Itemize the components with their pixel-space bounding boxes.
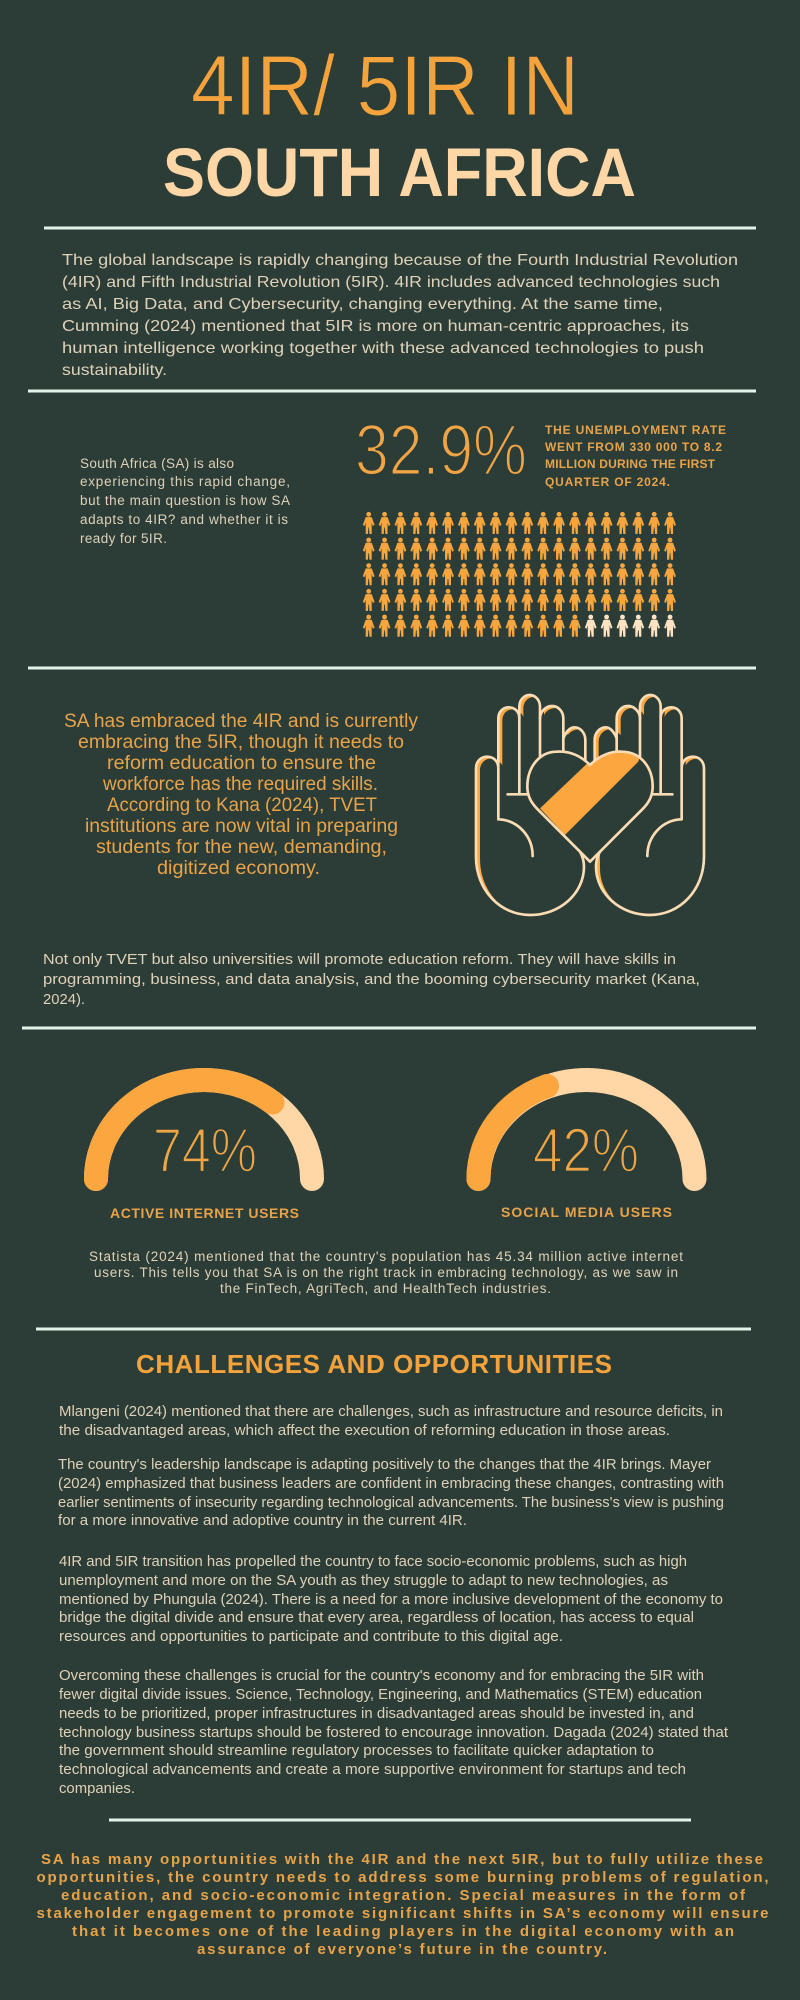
paragraph: socio-economic problems: bridge the digital divide and ensure that every area, regardless of location, has access to equal: [59, 1610, 694, 1626]
paragraph: overcoming challenges: fewer digital divide issues. Science, Technology, Engineering, and Mathematics (STEM) education: [59, 1687, 702, 1703]
paragraph: mlangeni: the disadvantaged areas, which affect the execution of reforming education in those areas.: [59, 1423, 670, 1439]
paragraph: mlangeni: Mlangeni (2024) mentioned that there are challenges, such as infrastructure and resource deficits, in: [59, 1404, 723, 1420]
paragraph: socio-economic problems: resources and opportunities to participate and contribute to this digital age.: [59, 1629, 563, 1645]
intro paragraph: sustainability.: [62, 362, 167, 379]
TVET and universities paragraph: Not only TVET but also universities will promote education reform. They will have skills in: [43, 952, 676, 968]
statista paragraph: the FinTech, AgriTech, and HealthTech industries.: [220, 1281, 551, 1296]
paragraph: overcoming challenges: technology business startups should be fostered to encourage innovation. Dagada (2024) stated that: [59, 1725, 728, 1741]
south africa question text: South Africa (SA) is also: [80, 456, 234, 471]
south africa question text: but the main question is how SA: [80, 493, 290, 508]
unemployment description: WENT FROM 330 000 TO 8.2: [545, 440, 722, 454]
intro paragraph: (4IR) and Fifth Industrial Revolution (5IR). 4IR includes advanced technologies such: [62, 274, 720, 291]
paragraph: overcoming challenges: technological advancements and create a more supportive environment for startups and tech: [59, 1762, 686, 1778]
gauge: active internet users: 74%: [153, 1116, 257, 1186]
paragraph: leadership: [58, 1457, 724, 1529]
orange embrace paragraph: SA has embraced the 4IR and is currently: [64, 711, 418, 732]
paragraph: socio-economic problems: unemployment and more on the SA youth as they struggle to adapt to new technologies, as: [59, 1573, 668, 1589]
gauge: social media users: 42%: [533, 1116, 639, 1186]
orange embrace paragraph: [64, 711, 418, 879]
paragraph: leadership: earlier sentiments of insecurity regarding technological advancements. The business's view is pushing: [58, 1495, 724, 1511]
gauge: social media users: [478, 1080, 694, 1220]
orange embrace paragraph: workforce has the required skills.: [102, 774, 378, 795]
paragraph: leadership: The country's leadership landscape is adapting positively to the changes that the 4IR brings. Mayer: [58, 1457, 711, 1473]
intro paragraph: [62, 252, 738, 379]
conclusion paragraph: SA has many opportunities with the 4IR and the next 5IR, but to fully utilize these: [41, 1851, 763, 1868]
TVET and universities paragraph: programming, business, and data analysis, and the booming cybersecurity market (Kana,: [43, 972, 700, 988]
unemployment description: [545, 423, 726, 489]
paragraph: socio-economic problems: mentioned by Phungula (2024). There is a need for a more inclusive development of the economy to: [59, 1592, 723, 1608]
south africa question text: adapts to 4IR? and whether it is: [80, 512, 288, 527]
orange embrace paragraph: students for the new, demanding,: [96, 837, 387, 858]
paragraph: mlangeni: [59, 1404, 723, 1439]
paragraph: overcoming challenges: companies.: [59, 1781, 135, 1797]
orange embrace paragraph: reform education to ensure the: [107, 753, 376, 774]
icon: hands holding heart: [476, 695, 708, 917]
south africa question text: [80, 456, 290, 546]
conclusion paragraph: stakeholder engagement to promote significant shifts in SA’s economy will ensure: [36, 1905, 769, 1922]
paragraph: socio-economic problems: 4IR and 5IR transition has propelled the country to face socio-economic problems, such as high: [59, 1554, 687, 1570]
paragraph: overcoming challenges: needs to be prioritized, proper infrastructures in disadvantaged areas should be invested in, and: [59, 1706, 694, 1722]
gauge: active internet users: [96, 1080, 312, 1221]
title: [163, 39, 636, 211]
orange embrace paragraph: According to Kana (2024), TVET: [107, 795, 377, 816]
heading: challenges and opportunities: CHALLENGES AND OPPORTUNITIES: [136, 1349, 612, 1379]
TVET and universities paragraph: 2024).: [43, 992, 85, 1008]
statista paragraph: Statista (2024) mentioned that the country's population has 45.34 million active internet: [89, 1249, 683, 1264]
paragraph: overcoming challenges: Overcoming these challenges is crucial for the country's economy and for embracing the 5IR with: [59, 1668, 704, 1684]
paragraph: overcoming challenges: [59, 1668, 728, 1797]
unemployment description: QUARTER OF 2024.: [545, 475, 670, 489]
conclusion paragraph: opportunities, the country needs to address some burning problems of regulation,: [36, 1869, 768, 1886]
orange embrace paragraph: digitized economy.: [157, 858, 320, 879]
intro paragraph: Cumming (2024) mentioned that 5IR is more on human-centric approaches, its: [62, 318, 689, 335]
people pictogram: [363, 512, 676, 637]
paragraph: leadership: for a more innovative and adoptive country in the current 4IR.: [58, 1513, 467, 1529]
conclusion paragraph: assurance of everyone’s future in the country.: [197, 1941, 607, 1958]
paragraph: overcoming challenges: the government should streamline regulatory processes to facilitate quicker adaptation to: [59, 1743, 654, 1759]
unemployment statistic: 32.9%: [355, 412, 527, 490]
south africa question text: ready for 5IR.: [80, 531, 167, 546]
statista paragraph: users. This tells you that SA is on the right track in embracing technology, as we saw in: [94, 1265, 678, 1280]
unemployment description: THE UNEMPLOYMENT RATE: [545, 423, 726, 437]
statista paragraph: [89, 1249, 683, 1296]
title: SOUTH AFRICA: [163, 134, 636, 211]
gauge: social media users: SOCIAL MEDIA USERS: [501, 1204, 672, 1220]
paragraph: socio-economic problems: [59, 1554, 723, 1645]
orange embrace paragraph: institutions are now vital in preparing: [85, 816, 398, 837]
intro paragraph: as AI, Big Data, and Cybersecurity, changing everything. At the same time,: [62, 296, 663, 313]
south africa question text: experiencing this rapid change,: [80, 474, 290, 489]
orange embrace paragraph: embracing the 5IR, though it needs to: [78, 732, 404, 753]
paragraph: leadership: (2024) emphasized that business leaders are confident in embracing these changes, contrasting with: [58, 1476, 724, 1492]
conclusion paragraph: education, and socio-economic integration. Special measures in the form of: [61, 1887, 746, 1904]
intro paragraph: human intelligence working together with these advanced technologies to push: [62, 340, 704, 357]
title: 4IR/ 5IR IN: [191, 39, 579, 134]
conclusion paragraph: that it becomes one of the leading players in the digital economy with an: [72, 1923, 734, 1940]
TVET and universities paragraph: [43, 952, 700, 1008]
unemployment description: MILLION DURING THE FIRST: [545, 457, 716, 471]
conclusion paragraph: [36, 1851, 769, 1958]
gauge: active internet users: ACTIVE INTERNET USERS: [110, 1205, 299, 1221]
intro paragraph: The global landscape is rapidly changing because of the Fourth Industrial Revolution: [62, 252, 738, 269]
